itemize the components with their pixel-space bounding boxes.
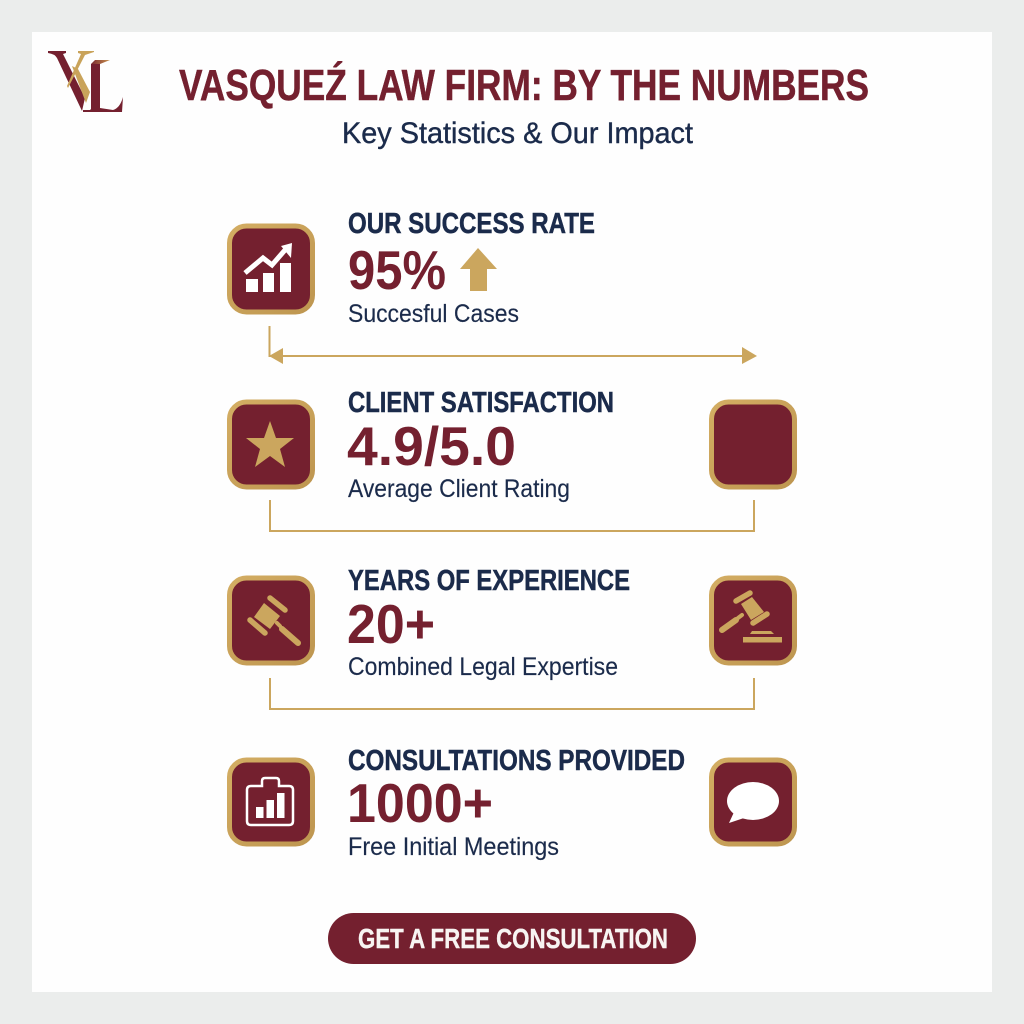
icon: gavel with block (712, 578, 794, 663)
stat: consultations provided (230, 745, 794, 861)
button: call to action (328, 913, 696, 964)
connector: double arrow (269, 326, 757, 364)
connector: bracket 1 (270, 500, 754, 531)
button: call to action: GET A FREE CONSULTATION (358, 923, 668, 954)
value: 95% (348, 239, 446, 301)
stat: client satisfaction (230, 387, 794, 503)
subtitle: Key Statistics & Our Impact (342, 117, 694, 150)
description: Combined Legal Expertise (348, 653, 618, 681)
heading: CONSULTATIONS PROVIDED (348, 745, 685, 777)
icon: briefcase chart (230, 760, 312, 844)
icon: up arrow (460, 248, 497, 291)
description: Average Client Rating (348, 475, 570, 503)
value: 1000+ (347, 772, 493, 834)
logo: VL monogram (48, 51, 123, 112)
icon: gavel (230, 578, 312, 663)
value: 4.9/5.0 (347, 415, 516, 477)
value: 20+ (347, 593, 435, 655)
heading: YEARS OF EXPERIENCE (348, 565, 630, 597)
stat: success rate (230, 208, 595, 328)
description: Free Initial Meetings (348, 833, 559, 861)
icon: rising bar chart (230, 226, 312, 312)
connector: bracket 2 (270, 678, 754, 709)
title: VASQUEŹ LAW FIRM: BY THE NUMBERS (179, 60, 869, 110)
heading: CLIENT SATISFACTION (348, 387, 614, 419)
icon: speech bubble (712, 760, 794, 844)
icon: blank tile (712, 402, 794, 487)
icon: star (230, 402, 312, 487)
stat: years of experience (230, 565, 794, 681)
description: Succesful Cases (348, 300, 519, 328)
heading: OUR SUCCESS RATE (348, 208, 595, 240)
